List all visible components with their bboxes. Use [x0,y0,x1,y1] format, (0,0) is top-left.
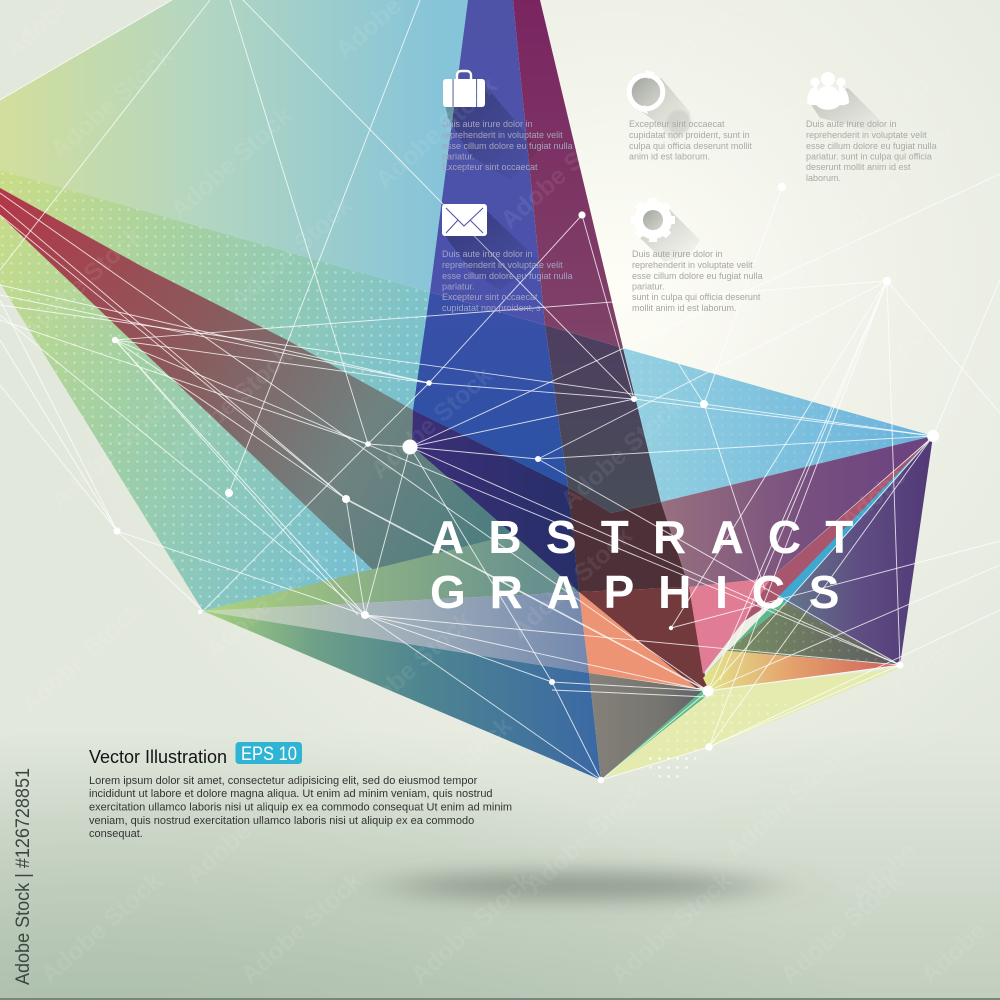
watermark: Adobe Stock: Adobe [875,302,952,374]
text block: briefcase: Excepteur sint occaecat [442,162,538,172]
ground shadow [390,873,770,899]
icon: gear [631,198,700,262]
text block: refresh: cupidatat non proident, sunt in [629,130,750,140]
watermark: Adobe Stock: Adobe [880,52,957,124]
text block: gear: Duis aute irure dolor in [632,249,723,259]
text block: people: esse cillum dolore eu fugiat nulla [806,141,937,151]
watermark: Adobe Stock: Adobe Stock [520,776,653,899]
watermark: Adobe Stock: Adobe Stock [695,251,828,374]
text block: people: laborum. [806,173,841,183]
body text: exercitation ullamco laboris nisi ut aliquip ex ea commodo consequat Ut enim ad minim [89,802,512,814]
text block: envelope: cupidatat non proident, s [442,303,541,313]
watermark: Adobe Stock: Adobe Stock [165,341,298,464]
watermark: Adobe Stock: Adobe Stock [605,866,738,989]
icon: people group [807,72,880,135]
watermark: Adobe Stock: Adobe [845,837,922,909]
text block: gear: sunt in culpa qui officia deserunt [632,292,761,302]
body text [89,775,512,840]
network nodes [112,183,939,783]
body text: Lorem ipsum dolor sit amet, consectetur adipisicing elit, sed do eiusmod tempor [89,775,478,787]
text block: gear [632,249,763,313]
heading: vector illustration: Vector Illustration [89,747,227,767]
title [430,511,878,618]
watermark: Adobe Stock: Adobe Stock [495,111,628,234]
text block: envelope: Duis aute irure dolor in [442,249,533,259]
text block: people: Duis aute irure dolor in [806,119,897,129]
title: ABSTRACT [431,511,878,563]
panel: left geometric facets [0,0,601,780]
watermark: Adobe Stock: Adobe Stock [385,711,518,834]
text block: people: deserunt mollit anim id est [806,162,911,172]
badge: EPS 10: EPS 10 [241,743,297,765]
watermark: Adobe Stock: Adobe Stock [775,866,908,989]
text block: envelope: reprehenderit in voluptate velit [442,260,563,270]
watermark: Adobe Stock: Adobe Stock [35,866,168,989]
watermark: Adobe Stock: Adobe Stock [15,596,148,719]
side credit: Adobe Stock id: Adobe Stock | #126728851 [12,768,34,985]
icon: briefcase [443,71,540,180]
text block: people: reprehenderit in voluptate velit [806,130,927,140]
text block: briefcase: pariatur. [442,152,475,162]
text block: people [806,119,937,183]
text block: briefcase: Duis aute irure dolor in [442,119,533,129]
body text: consequat. [89,828,143,840]
watermark: Adobe Stock: Adobe Stock [555,391,688,514]
text block: gear: mollit anim id est laborum. [632,303,737,313]
watermark: Adobe Stock: Adobe Stock [345,606,478,729]
watermark: Adobe Stock: Adobe Stock [365,361,498,484]
watermark: Adobe Stock: Adobe Stock [370,71,503,194]
text block: envelope [442,249,573,313]
text block: envelope: Excepteur sint occaecat [442,292,538,302]
watermark: Adobe Stock: Adobe [835,462,912,534]
body text: incididunt ut labore et dolore magna aliqua. Ut enim ad minim veniam, quis nostrud [89,788,493,800]
watermark: Adobe Stock: Adobe Stock [405,866,538,989]
text block: gear: pariatur. [632,282,665,292]
text block: gear: esse cillum dolore eu fugiat nulla [632,271,763,281]
text block: briefcase: esse cillum dolore eu fugiat nulla [442,141,573,151]
text block: envelope: pariatur. [442,282,475,292]
text block: refresh [629,119,752,162]
watermark: Adobe Stock: Adobe Stock [720,741,853,864]
dots below the apex [643,750,700,787]
icon: refresh arrows [629,70,691,142]
text block: envelope: esse cillum dolore eu fugiat nulla [442,271,573,281]
watermark: Adobe Stock: Adobe Stock [505,521,638,644]
watermark: Adobe Stock: Adobe [915,917,992,989]
watermark: Adobe Stock: Adobe Stock [235,866,368,989]
text block: briefcase: reprehenderit in voluptate velit [442,130,563,140]
panel: right geometric facets [579,348,933,780]
watermark: Adobe Stock: Adobe Stock [705,71,838,194]
watermark: Adobe Stock: Adobe Stock [830,121,963,244]
watermark: Adobe Stock: Adobe Stock [200,541,333,664]
title: GRAPHICS [430,566,863,618]
panel: blue and maroon columns [412,0,707,688]
network mesh lines [0,0,1000,780]
icon: envelope [442,204,540,290]
text block: refresh: culpa qui officia deserunt mollit [629,141,752,151]
watermark: Adobe Stock: Adobe Stock [45,391,178,514]
watermark: Adobe Stock: Adobe Stock [225,191,358,314]
text block: people: pariatur. sunt in culpa qui officia [806,152,932,162]
text block: gear: reprehenderit in voluptate velit [632,260,753,270]
watermark: Adobe Stock: Adobe Stock [45,41,178,164]
text block: refresh: anim id est laborum. [629,152,710,162]
text block: refresh: Excepteur sint occaecat [629,119,725,129]
watermark: Adobe Stock: Adobe Stock [165,101,298,224]
text block: briefcase [442,119,573,172]
body text: veniam, quis nostrud exercitation ullamco laboris nisi ut aliquip ex ea commodo [89,815,474,827]
watermark: Adobe Stock: Adobe Stock [180,766,313,889]
watermark: Adobe Stock: Adobe [885,632,962,704]
watermark: Adobe Stock: Adobe Stock [15,221,148,344]
